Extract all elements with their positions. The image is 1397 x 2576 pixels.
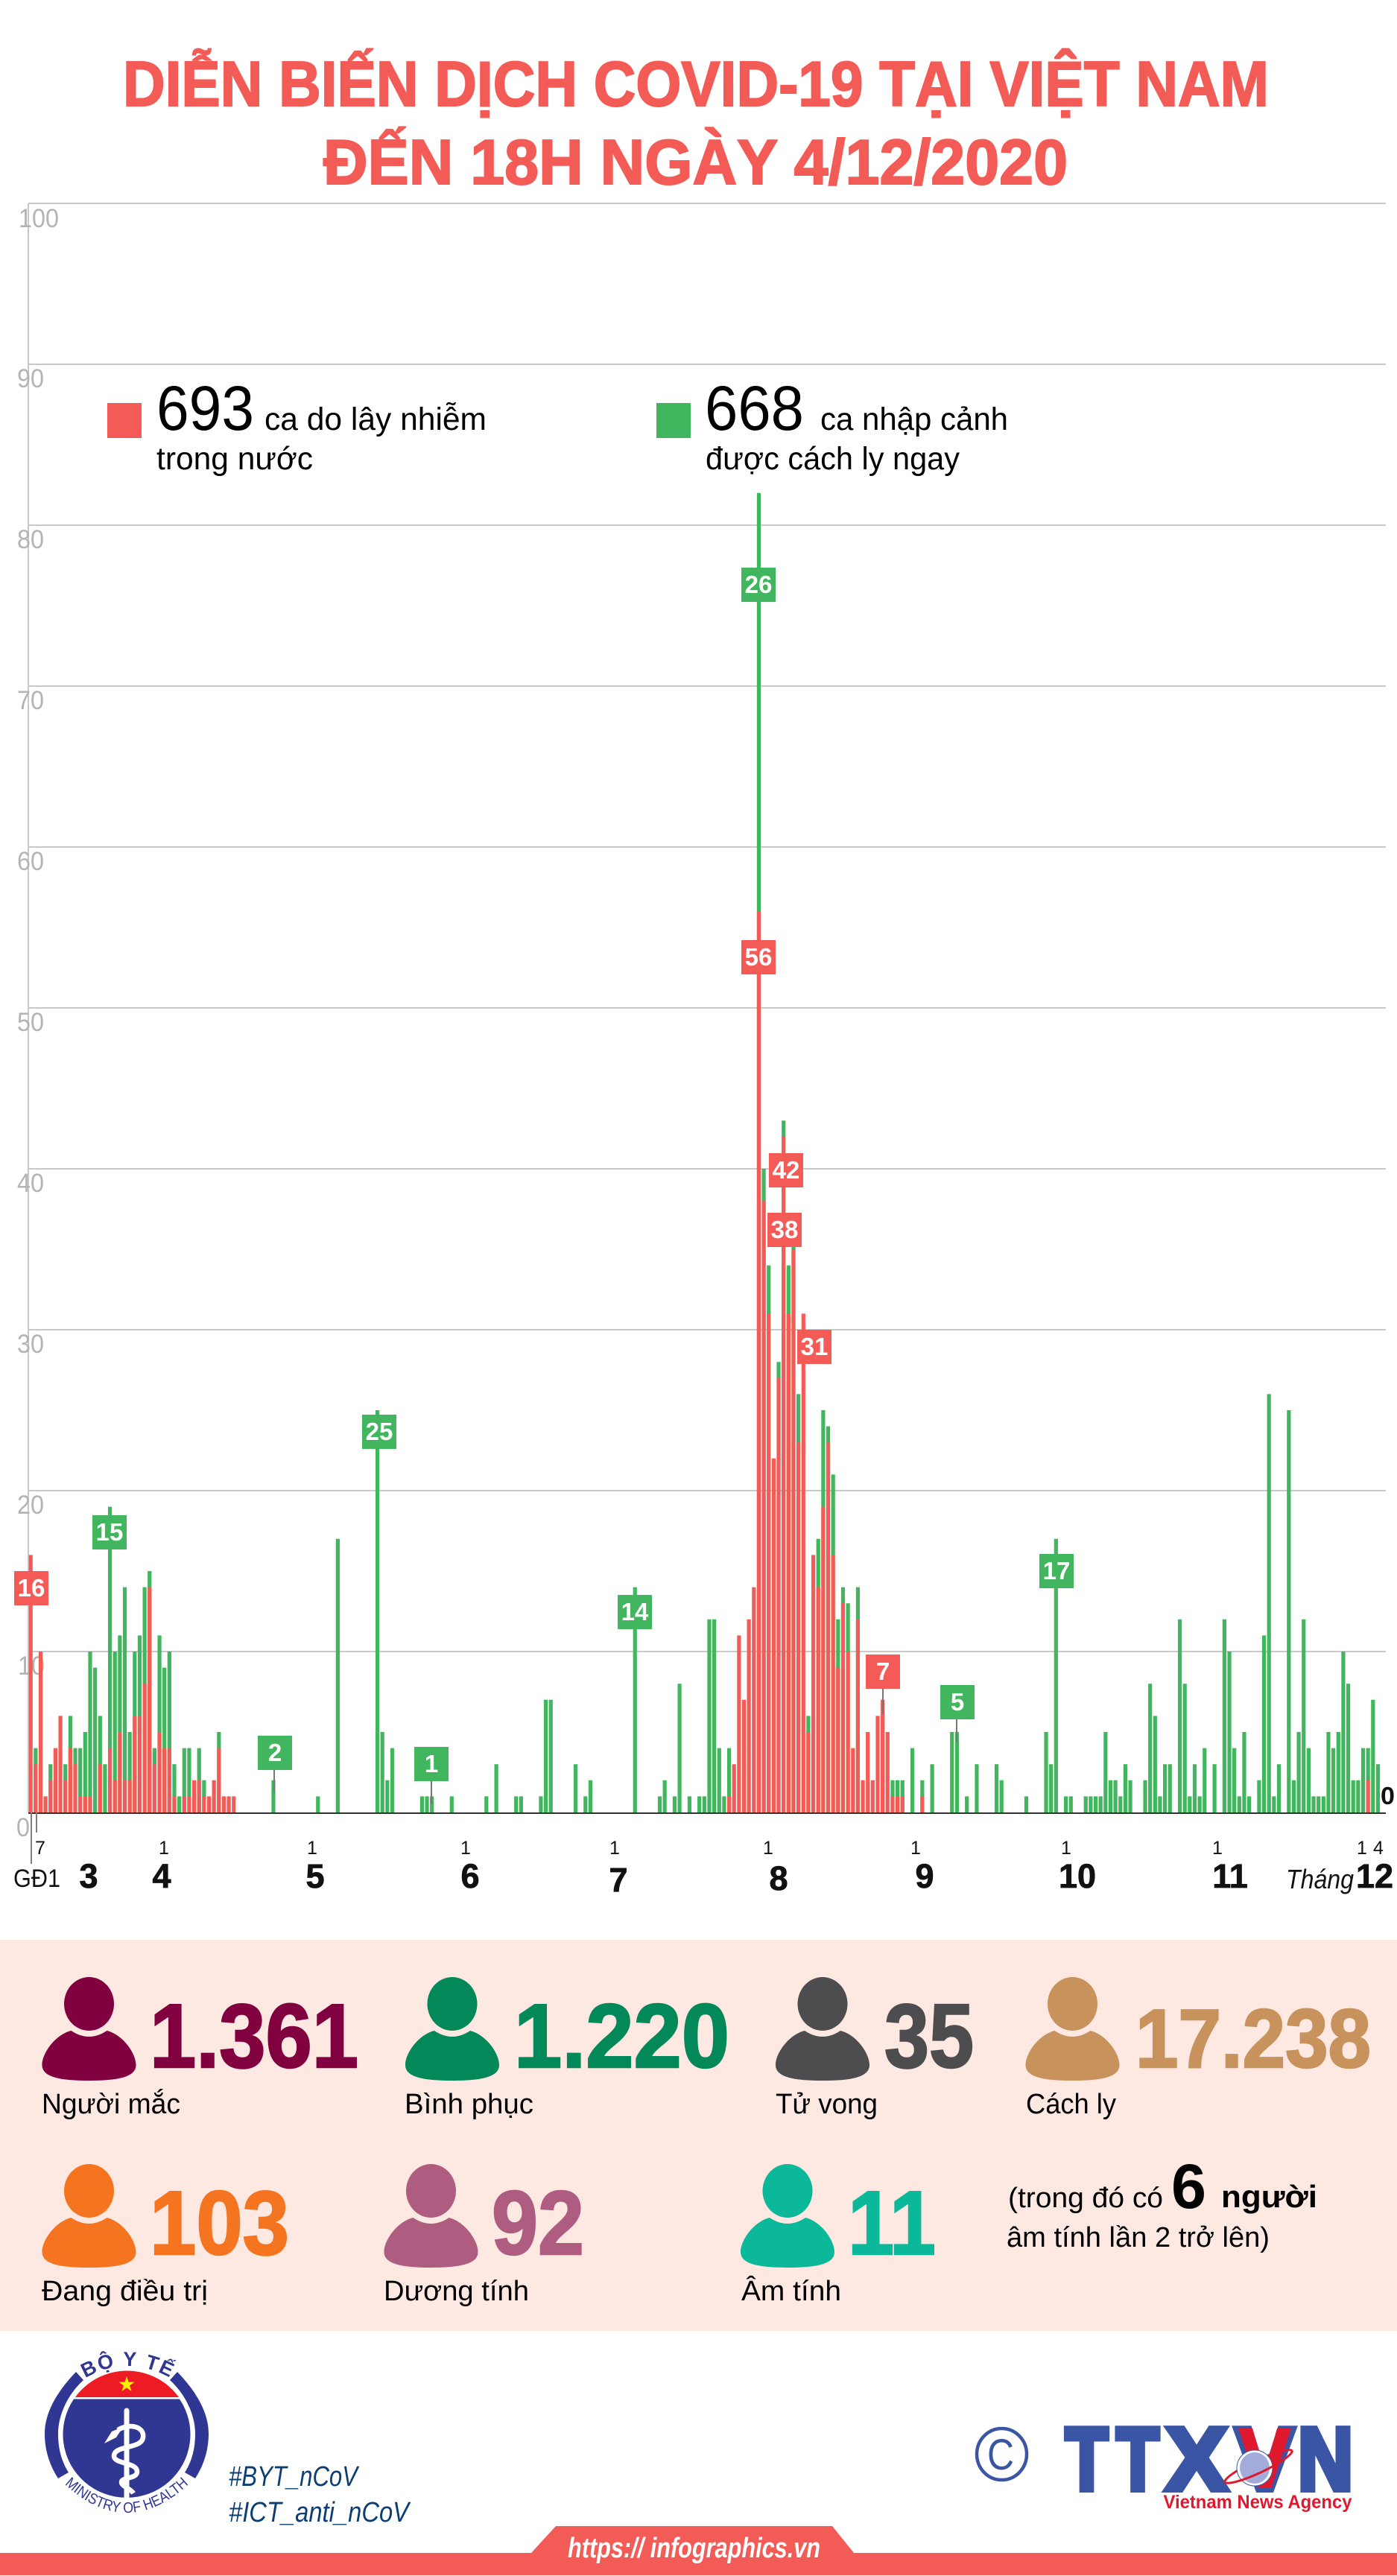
callout: 26: 26 [745,571,772,598]
callout: 14: 14 [621,1598,649,1625]
title [123,48,1269,198]
footer bar with url tab: https:// infographics.vn [568,2533,820,2564]
x axis: day ticks and months: 7 [609,1861,628,1899]
logo: Ministry of Health: BỘ Y TẾ [80,2351,177,2378]
callout: 31: 31 [801,1333,828,1360]
stat: âm tính: Âm tính [741,2275,841,2307]
logo: Ministry of Health: MINISTRY OF HEALTH [66,2477,188,2513]
legend: imported cases: ca nhập cảnh [820,402,1008,437]
legend: local cases: trong nước [156,441,313,477]
x axis: day ticks and months: 3 [79,1857,98,1895]
callout: 16: 16 [18,1574,45,1602]
note: negative twice: 6 [1171,2151,1206,2221]
callout: 5 [940,1685,975,1742]
x axis: day ticks and months: 12 [1356,1857,1393,1895]
callout: 38: 38 [771,1216,798,1243]
x axis: day ticks and months: 1 [159,1838,169,1859]
callout: 1 [414,1747,449,1804]
x axis: day ticks and months [13,1812,1393,1899]
callout: 56: 56 [745,943,772,971]
note: negative twice: người [1221,2179,1317,2214]
stat: đang điều trị: 103 [150,2172,289,2274]
hashtags: #ICT_anti_nCoV [229,2497,411,2528]
y axis labels: 70 [17,686,44,715]
x axis: day ticks and months: 11 [1212,1857,1248,1895]
logo: Ministry of Health [45,2351,209,2513]
callout: 56 [741,940,776,974]
logo: TTXVN: T [1065,2410,1108,2509]
callout: 17 [1039,1554,1074,1588]
copyright mark [977,2429,1027,2480]
x axis: day ticks and months: 1 [1061,1838,1071,1859]
red bars: local cases [31,911,1368,1812]
callout: 25: 25 [366,1418,393,1445]
stat: tử vong: 35 [884,1985,974,2087]
callout: 31 [797,1330,831,1364]
stat: bình phục: 1.220 [514,1985,729,2087]
logo: TTXVN: V [1235,2410,1294,2509]
stat: âm tính: 11 [848,2172,936,2274]
stat: người mắc: Người mắc [42,2088,180,2120]
legend: local cases: 693 [156,373,254,443]
callout: 7 [866,1655,900,1714]
hashtags [229,2461,411,2528]
note: negative twice [1007,2151,1317,2253]
stat: người mắc: 1.361 [150,1985,358,2087]
x axis: day ticks and months: Tháng [1286,1864,1354,1894]
y axis labels: 80 [17,525,44,554]
note: negative twice: (trong đó có [1008,2183,1163,2214]
callout: 25 [362,1415,396,1449]
stat: tử vong: Tử vong [776,2089,878,2120]
stat: cách ly: Cách ly [1026,2089,1116,2120]
stat: bình phục [405,1977,729,2120]
y axis labels [16,204,59,1842]
stat: bình phục: Bình phục [405,2089,533,2120]
callout: 1: 1 [425,1750,438,1777]
logo: TTXVN: Vietnam News Agency [1164,2492,1352,2513]
stat: dương tính: Dương tính [384,2276,529,2307]
callout: 2 [258,1736,292,1792]
callout: 7: 7 [876,1657,890,1685]
legend: imported cases: 668 [705,373,804,443]
x axis: day ticks and months: 1 [763,1838,773,1859]
legend: local cases: ca do lây nhiễm [264,402,487,437]
x axis: day ticks and months: 4 [152,1857,171,1895]
stat: cách ly [1025,1977,1371,2120]
x axis: day ticks and months: 1 [609,1838,620,1859]
callout: 15 [92,1515,127,1549]
callout: 38 [767,1213,802,1247]
footer bar with url tab [0,2526,1397,2575]
callout: 16 [14,1571,48,1605]
x axis: day ticks and months: 7 [35,1838,45,1859]
callout: 2: 2 [268,1739,282,1766]
callout: 26 [741,568,776,602]
y axis labels: 30 [17,1330,44,1359]
y axis labels: 10 [18,1652,45,1681]
x axis: day ticks and months: 5 [305,1857,325,1895]
legend: imported cases: được cách ly ngay [706,441,960,477]
y axis labels: 60 [17,847,44,876]
last value: 0: 0 [1381,1782,1395,1809]
x axis: day ticks and months: 1 [910,1838,921,1859]
x axis: day ticks and months: 1 [460,1838,471,1859]
x axis: day ticks and months: 6 [460,1857,480,1895]
callout: 17: 17 [1043,1557,1070,1584]
stat: người mắc [42,1977,358,2120]
y axis labels: 100 [19,204,59,233]
callout: 42: 42 [773,1156,799,1184]
legend: imported cases [656,373,1008,477]
title: ĐẾN 18H NGÀY 4/12/2020 [323,127,1068,198]
green bars: imported cases (stacked total) [36,493,1378,1812]
logo: TTXVN [1065,2410,1353,2513]
stat: dương tính [384,2164,584,2307]
note: negative twice: âm tính lần 2 trở lên) [1007,2222,1270,2253]
y axis labels: 40 [17,1169,44,1198]
logo: TTXVN: V [1240,2413,1290,2504]
bar chart: daily cases [13,203,1395,1899]
copyright mark: C [987,2431,1014,2479]
x axis: day ticks and months: 9 [915,1857,934,1895]
stat: tử vong [776,1977,974,2120]
logo: TTXVN: N [1298,2410,1353,2509]
x axis: day ticks and months: 8 [769,1859,788,1897]
y axis labels: 50 [17,1008,44,1037]
x axis: day ticks and months: 10 [1059,1857,1096,1895]
legend: local cases [107,373,487,477]
stat: cách ly: 17.238 [1135,1993,1371,2085]
y axis labels: 20 [17,1491,44,1520]
hashtags: #BYT_nCoV [229,2461,360,2493]
callout: 5: 5 [951,1688,964,1716]
panel: statistics [0,1940,1397,2331]
x axis: day ticks and months: 1 [1212,1838,1223,1859]
title: DIỄN BIẾN DỊCH COVID-19 TẠI VIỆT NAM [123,48,1269,120]
x axis: day ticks and months: 4 [1373,1838,1384,1859]
y axis labels: 0 [16,1813,30,1842]
stat: âm tính [741,2164,936,2307]
logo: TTXVN: X [1166,2410,1227,2509]
stat: dương tính: 92 [492,2172,584,2274]
x axis: day ticks and months: 1 [1357,1838,1367,1859]
x axis: day ticks and months: GĐ1 [13,1865,60,1893]
stat: đang điều trị [42,2164,289,2307]
x axis: day ticks and months: 1 [307,1838,317,1859]
callout: 15: 15 [96,1518,123,1546]
y axis labels: 90 [17,364,44,393]
callout: 42 [769,1153,803,1187]
logo: TTXVN: T [1116,2410,1159,2509]
callout: 14 [618,1595,652,1629]
stat: đang điều trị: Đang điều trị [42,2276,208,2307]
